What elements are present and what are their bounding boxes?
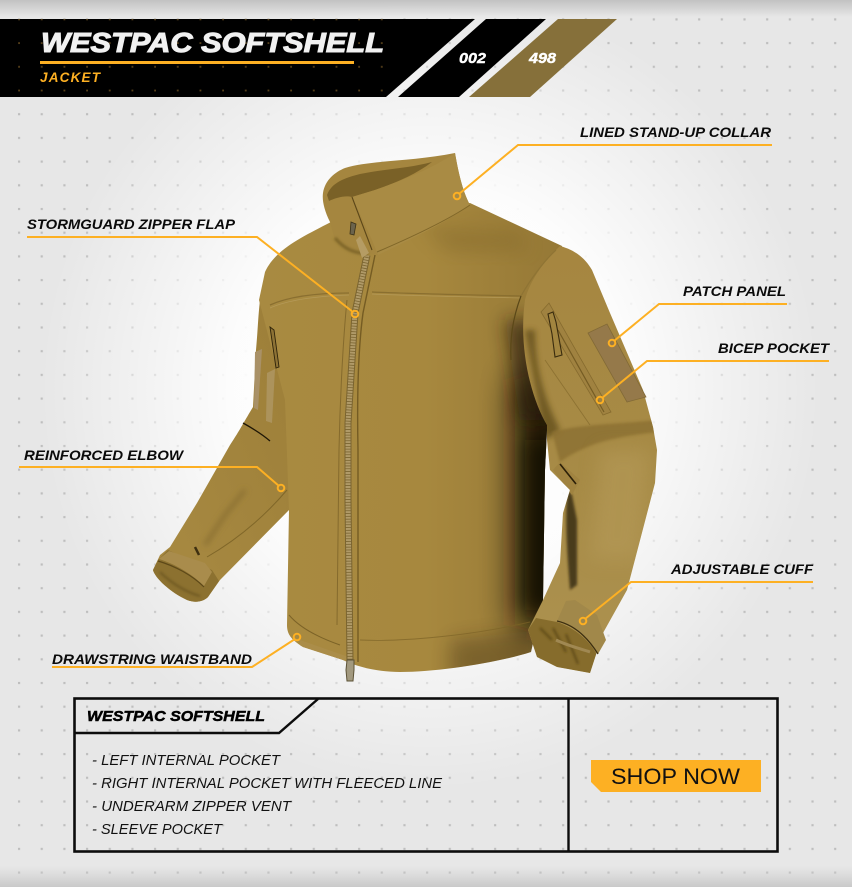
feature list: - LEFT INTERNAL POCKET — [92, 753, 281, 769]
right cuff strap — [557, 600, 606, 654]
banner: number block 498: 498 — [528, 50, 557, 67]
title: WESTPAC SOFTSHELL — [41, 27, 384, 58]
callout: stormguard zipper flap: STORMGUARD ZIPPER FLAP — [27, 216, 236, 232]
collar zipper pull — [350, 222, 356, 235]
subtitle: JACKET — [40, 70, 102, 85]
callout: reinforced elbow — [19, 447, 284, 491]
panel tab outline — [75, 699, 318, 733]
yoke seams — [270, 292, 521, 305]
feature list: - RIGHT INTERNAL POCKET WITH FLEECED LINE — [92, 776, 442, 792]
callout: patch panel — [609, 283, 787, 346]
banner: number block 002: 002 — [459, 50, 487, 67]
callout: drawstring waistband — [52, 634, 300, 667]
panel: product details — [74, 698, 778, 852]
left sleeve — [153, 270, 296, 602]
callout: adjustable cuff — [580, 561, 813, 624]
callout: lined stand-up collar — [454, 124, 772, 199]
callout: adjustable cuff: ADJUSTABLE CUFF — [670, 561, 813, 577]
banner: number block 498 — [469, 19, 617, 97]
feature list — [92, 753, 442, 838]
sleeve seam — [521, 250, 556, 296]
callout: patch panel: PATCH PANEL — [683, 283, 786, 299]
inner collar — [327, 162, 432, 201]
callout: bicep pocket: BICEP POCKET — [718, 340, 831, 356]
bicep zipper pull — [548, 312, 562, 357]
feature list: - SLEEVE POCKET — [92, 822, 223, 838]
callout: reinforced elbow: REINFORCED ELBOW — [24, 447, 185, 463]
zipper pull — [346, 660, 354, 681]
callout: drawstring waistband: DRAWSTRING WAISTBAND — [52, 651, 252, 667]
callout: bicep pocket — [597, 340, 831, 403]
callout: stormguard zipper flap — [27, 216, 358, 317]
jacket illustration — [153, 153, 657, 681]
storm flap edges — [337, 300, 347, 625]
header banner — [0, 19, 617, 97]
button: shop now: SHOP NOW — [611, 764, 740, 789]
panel heading: WESTPAC SOFTSHELL — [87, 708, 265, 725]
body — [259, 203, 570, 681]
callout: lined stand-up collar: LINED STAND-UP COLLAR — [580, 124, 772, 140]
right cuff opening — [528, 618, 600, 673]
banner: number block 002 — [398, 19, 546, 97]
bicep zipper pocket — [541, 303, 611, 415]
left sleeve pocket and patch — [254, 327, 279, 423]
patch panel — [588, 324, 646, 402]
right sleeve — [511, 246, 657, 673]
feature list: - UNDERARM ZIPPER VENT — [92, 799, 292, 815]
title underline — [40, 61, 354, 64]
button: shop now — [591, 760, 761, 792]
zipper — [348, 255, 367, 660]
left cuff — [153, 550, 219, 602]
banner: black title bar — [0, 19, 475, 97]
collar — [323, 153, 470, 258]
